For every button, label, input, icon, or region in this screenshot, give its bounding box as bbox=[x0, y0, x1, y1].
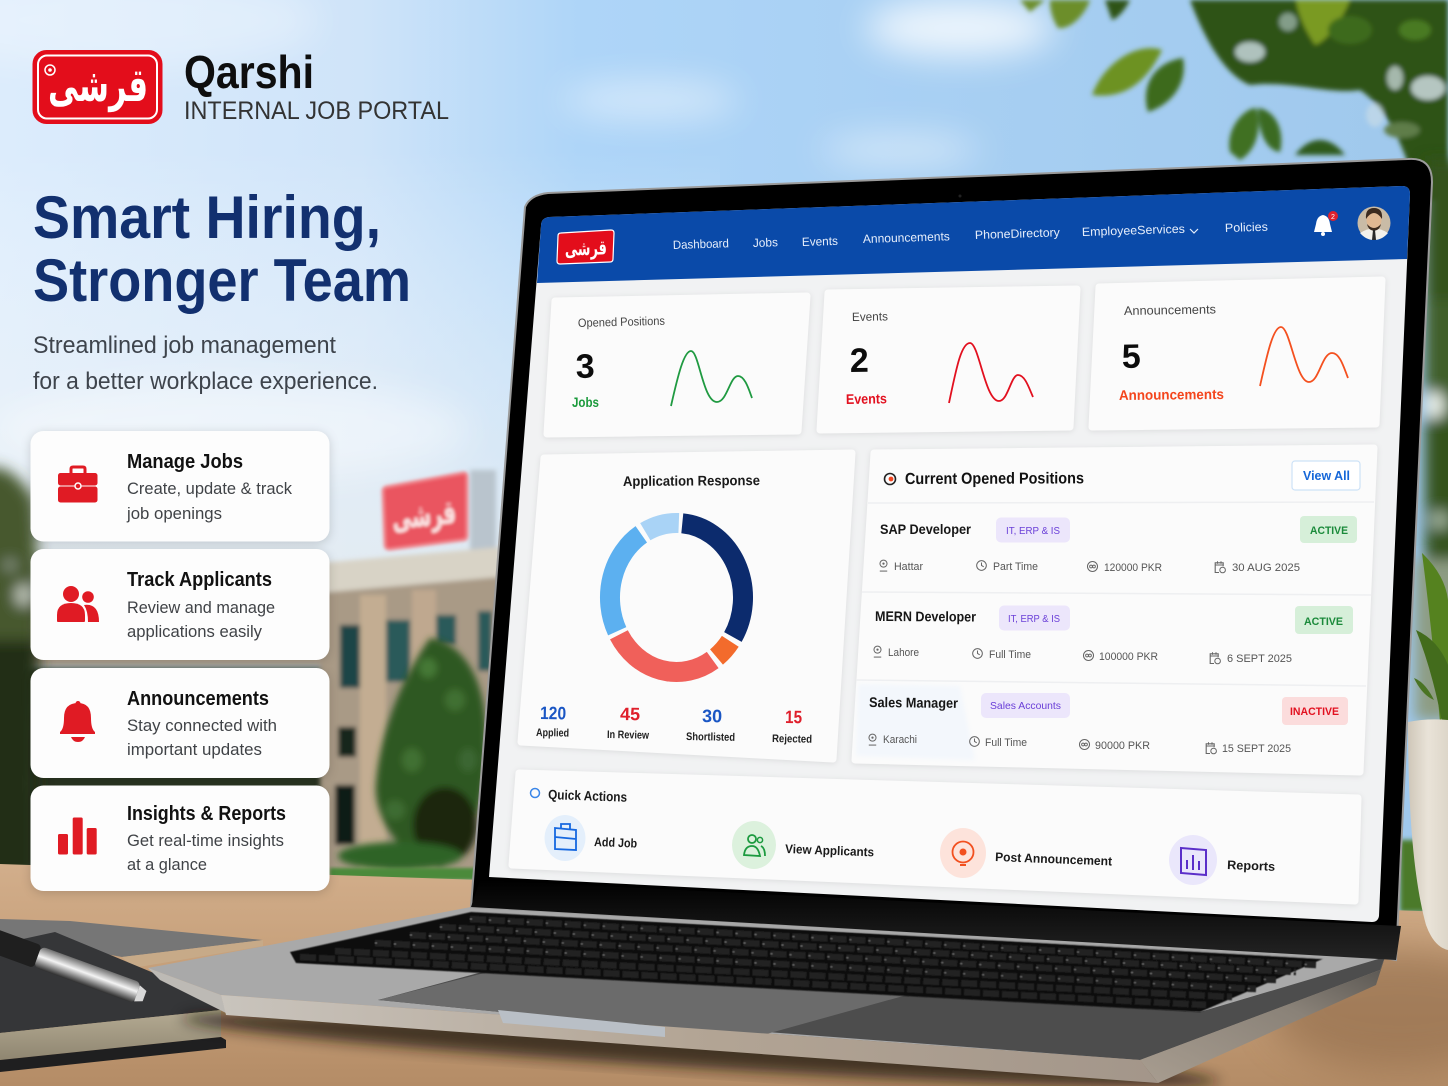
job row: SAP Developer bbox=[880, 516, 1357, 574]
nav bar bbox=[537, 186, 1410, 283]
nav links: PhoneDirectory bbox=[975, 225, 1060, 242]
icon: notification bell bbox=[1314, 211, 1338, 236]
stat card: events: Events bbox=[846, 390, 887, 407]
subheading: Streamlined job management bbox=[33, 332, 336, 359]
wooden desk bbox=[0, 864, 1448, 1086]
plant in pot at right edge bbox=[1408, 553, 1448, 950]
stat card: opened positions: Jobs bbox=[572, 394, 599, 410]
stat card: opened positions bbox=[547, 296, 807, 434]
feature card: track applicants bbox=[30, 549, 330, 660]
panel: application response donut: Application Response bbox=[623, 472, 760, 489]
stat card: announcements: 5 bbox=[1121, 338, 1141, 376]
nav links: Announcements bbox=[863, 229, 950, 246]
background: blurred tree and lawn beside laptop bbox=[330, 638, 1448, 912]
job row: SAP Developer: Part Time bbox=[993, 561, 1038, 573]
keyboard bbox=[290, 912, 1325, 1012]
feature card: manage jobs bbox=[30, 431, 330, 542]
job row: MERN Developer: MERN Developer bbox=[875, 608, 977, 625]
feature card: insights and reports bbox=[30, 786, 330, 891]
stat card: events bbox=[820, 289, 1077, 430]
laptop screen bbox=[489, 186, 1410, 922]
donut stats: Applied bbox=[536, 727, 569, 740]
main headline: Stronger Team bbox=[33, 247, 411, 314]
sign on the building bbox=[383, 473, 467, 549]
view all button: View All bbox=[1303, 468, 1350, 483]
sign on the building: قرشی bbox=[390, 493, 458, 537]
job row: Sales Manager: INACTIVE bbox=[1290, 706, 1339, 718]
job row: Sales Manager: Sales Manager bbox=[869, 694, 959, 711]
main headline bbox=[33, 184, 411, 314]
plant leaves bbox=[1414, 553, 1448, 722]
job row: Sales Manager bbox=[869, 693, 1348, 755]
nav links bbox=[673, 220, 1268, 252]
nav links: Policies bbox=[1225, 220, 1268, 235]
stat card: announcements: Announcements bbox=[1124, 302, 1216, 318]
feature card: announcements bbox=[30, 668, 330, 778]
job row: MERN Developer: 100000 PKR bbox=[1099, 651, 1158, 663]
stat card: events: 2 bbox=[849, 342, 869, 380]
donut stats: In Review bbox=[607, 729, 650, 742]
stat card: events: Events bbox=[852, 309, 888, 324]
logo bbox=[34, 51, 162, 123]
job row: SAP Developer: SAP Developer bbox=[880, 521, 971, 537]
laptop bbox=[148, 159, 1432, 1086]
donut stats bbox=[536, 703, 812, 746]
job row: MERN Developer: IT, ERP & IS bbox=[1008, 613, 1060, 625]
panel: current opened positions bbox=[855, 448, 1374, 772]
notebook: black book bbox=[0, 932, 226, 1072]
job row: MERN Developer: 6 SEPT 2025 bbox=[1227, 653, 1292, 665]
feature card: manage jobs: Manage Jobs bbox=[127, 451, 243, 473]
nav links: Events bbox=[802, 234, 838, 249]
nav links: Jobs bbox=[753, 235, 778, 250]
action: reports: Reports bbox=[1227, 858, 1275, 874]
donut stats: Shortlisted bbox=[686, 731, 735, 744]
quick actions heading: Quick Actions bbox=[548, 787, 627, 805]
brand header bbox=[34, 46, 449, 125]
laptop base bbox=[148, 907, 1385, 1083]
nav links: Dashboard bbox=[673, 236, 729, 252]
job row: MERN Developer bbox=[874, 606, 1353, 665]
background: tree foliage top right bbox=[1020, 0, 1448, 720]
portal name: INTERNAL JOB PORTAL bbox=[184, 97, 449, 125]
feature card: manage jobs: job openings bbox=[126, 504, 222, 523]
job row: MERN Developer: Lahore bbox=[888, 647, 919, 659]
subheading: for a better workplace experience. bbox=[33, 368, 378, 395]
job row: SAP Developer: ACTIVE bbox=[1310, 525, 1348, 537]
background: blurred office building with red sign bbox=[320, 470, 500, 880]
stat card: opened positions: 3 bbox=[575, 348, 595, 386]
action: reports bbox=[1169, 835, 1275, 885]
feature card: insights and reports: Get real-time insights bbox=[127, 831, 284, 850]
feature card: announcements: important updates bbox=[127, 740, 262, 759]
job row: SAP Developer: 30 AUG 2025 bbox=[1232, 562, 1300, 574]
stat card: announcements: Announcements bbox=[1119, 386, 1224, 403]
job row: Sales Manager: Karachi bbox=[883, 734, 917, 746]
donut stats: 120 bbox=[540, 703, 566, 723]
notebook: grey folder behind bbox=[0, 919, 263, 957]
action: post announcement bbox=[940, 828, 1113, 878]
feature card: manage jobs: Create, update & track bbox=[127, 479, 292, 498]
job row: Sales Manager: Sales Accounts bbox=[990, 700, 1061, 712]
brand name: Qarshi bbox=[184, 46, 314, 98]
panel: application response donut bbox=[521, 453, 852, 759]
stat card: opened positions: Opened Positions bbox=[578, 314, 665, 330]
main headline: Smart Hiring, bbox=[33, 184, 381, 251]
donut stats: 15 bbox=[785, 707, 802, 727]
donut chart bbox=[610, 523, 743, 672]
action: add job bbox=[544, 815, 638, 861]
icon: notification bell: 2 bbox=[1331, 214, 1335, 221]
notebook and pen bbox=[0, 919, 263, 1072]
feature card: announcements: Stay connected with bbox=[127, 716, 277, 735]
action: view applicants: View Applicants bbox=[785, 842, 874, 859]
action: add job: Add Job bbox=[594, 835, 638, 851]
feature card: insights and reports: Insights & Reports bbox=[127, 803, 286, 825]
job row: SAP Developer: IT, ERP & IS bbox=[1006, 525, 1060, 537]
donut stats: 45 bbox=[620, 704, 640, 724]
icon: bar chart bbox=[58, 818, 97, 854]
action: post announcement: Post Announcement bbox=[995, 850, 1113, 869]
icon: people bbox=[57, 586, 99, 622]
nav logo: قرشی bbox=[564, 235, 607, 261]
icon: bell bbox=[60, 701, 95, 742]
view all button bbox=[1292, 461, 1360, 490]
logo: قرشی bbox=[48, 58, 148, 112]
job row: Sales Manager: 90000 PKR bbox=[1095, 740, 1150, 752]
action: view applicants bbox=[732, 821, 874, 869]
laptop lid and bezel bbox=[471, 159, 1432, 960]
feature card: track applicants: Track Applicants bbox=[127, 569, 272, 591]
subheading bbox=[33, 332, 378, 395]
icon: briefcase bbox=[58, 467, 98, 502]
donut stats: 30 bbox=[702, 706, 722, 726]
job row: Sales Manager: 15 SEPT 2025 bbox=[1222, 743, 1291, 755]
job row: SAP Developer: Hattar bbox=[894, 561, 923, 573]
background: distant trees behind the feature cards bbox=[0, 467, 335, 880]
feature card: announcements: Announcements bbox=[127, 688, 269, 710]
job row: SAP Developer: 120000 PKR bbox=[1104, 562, 1162, 574]
job row: MERN Developer: ACTIVE bbox=[1304, 616, 1343, 628]
job row: MERN Developer: Full Time bbox=[989, 649, 1031, 661]
feature card: insights and reports: at a glance bbox=[127, 855, 207, 874]
pen bbox=[0, 928, 149, 1007]
section heading: Current Opened Positions bbox=[905, 470, 1084, 488]
donut stats: Rejected bbox=[772, 733, 812, 746]
stat card: announcements bbox=[1092, 280, 1382, 427]
nav links: EmployeeServices bbox=[1082, 222, 1185, 239]
nav logo bbox=[557, 230, 614, 264]
avatar bbox=[1358, 206, 1390, 240]
feature card: track applicants: applications easily bbox=[127, 622, 262, 641]
feature card: track applicants: Review and manage bbox=[127, 598, 275, 617]
panel: quick actions bbox=[512, 773, 1358, 901]
job row: Sales Manager: Full Time bbox=[985, 737, 1027, 749]
